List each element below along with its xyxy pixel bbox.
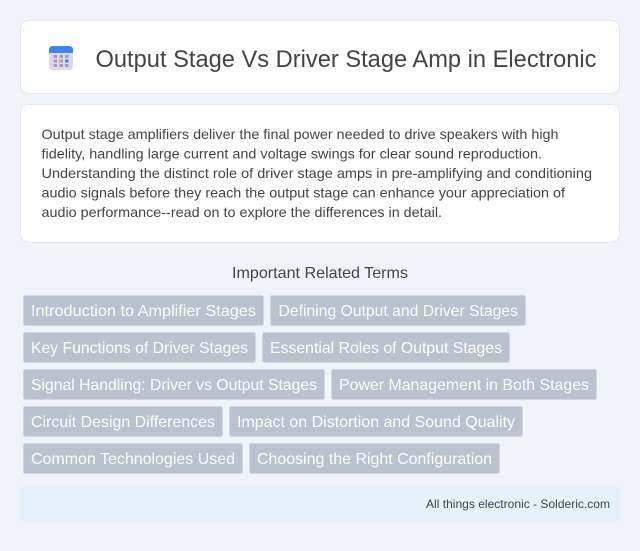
- intro paragraph: Output stage amplifiers deliver the final power needed to drive speakers with high: [42, 126, 558, 142]
- header card: [20, 20, 620, 94]
- intro paragraph: audio signals before they reach the output stage can enhance your appreciation of: [42, 184, 565, 200]
- tag: Signal Handling: Driver vs Output Stages: [31, 377, 317, 394]
- tag: Introduction to Amplifier Stages: [31, 303, 256, 320]
- tag: [24, 444, 242, 474]
- tag: [24, 296, 264, 326]
- tag: Power Management in Both Stages: [339, 377, 589, 394]
- intro paragraph: Understanding the distinct role of driver stage amps in pre-amplifying and conditioning: [42, 165, 592, 181]
- tag: [262, 332, 510, 362]
- footer: [20, 487, 620, 521]
- intro paragraph: [42, 126, 592, 220]
- heading: related terms: Important Related Terms: [232, 265, 408, 282]
- tag: [24, 332, 256, 362]
- tag: [250, 444, 500, 474]
- intro card: [20, 104, 620, 242]
- tag: [24, 370, 324, 400]
- related terms tags: [24, 296, 596, 474]
- tag: Choosing the Right Configuration: [257, 451, 492, 468]
- tag: [332, 370, 596, 400]
- tag: [24, 406, 222, 436]
- tag: Defining Output and Driver Stages: [278, 303, 518, 320]
- intro paragraph: fidelity, handling large current and voltage swings for clear sound reproduction.: [42, 146, 542, 162]
- tag: Common Technologies Used: [31, 451, 235, 468]
- title: Output Stage Vs Driver Stage Amp in Electronic: [96, 46, 596, 73]
- tag: Essential Roles of Output Stages: [270, 340, 502, 357]
- intro paragraph: audio performance--read on to explore the differences in detail.: [42, 204, 442, 220]
- tag: [270, 296, 526, 326]
- tag: Circuit Design Differences: [31, 414, 215, 431]
- tag: Key Functions of Driver Stages: [31, 340, 248, 357]
- tag: Impact on Distortion and Sound Quality: [237, 414, 515, 431]
- tag: [230, 406, 522, 436]
- icon: calendar: [49, 46, 73, 70]
- footer text: All things electronic - Solderic.com: [426, 497, 610, 511]
